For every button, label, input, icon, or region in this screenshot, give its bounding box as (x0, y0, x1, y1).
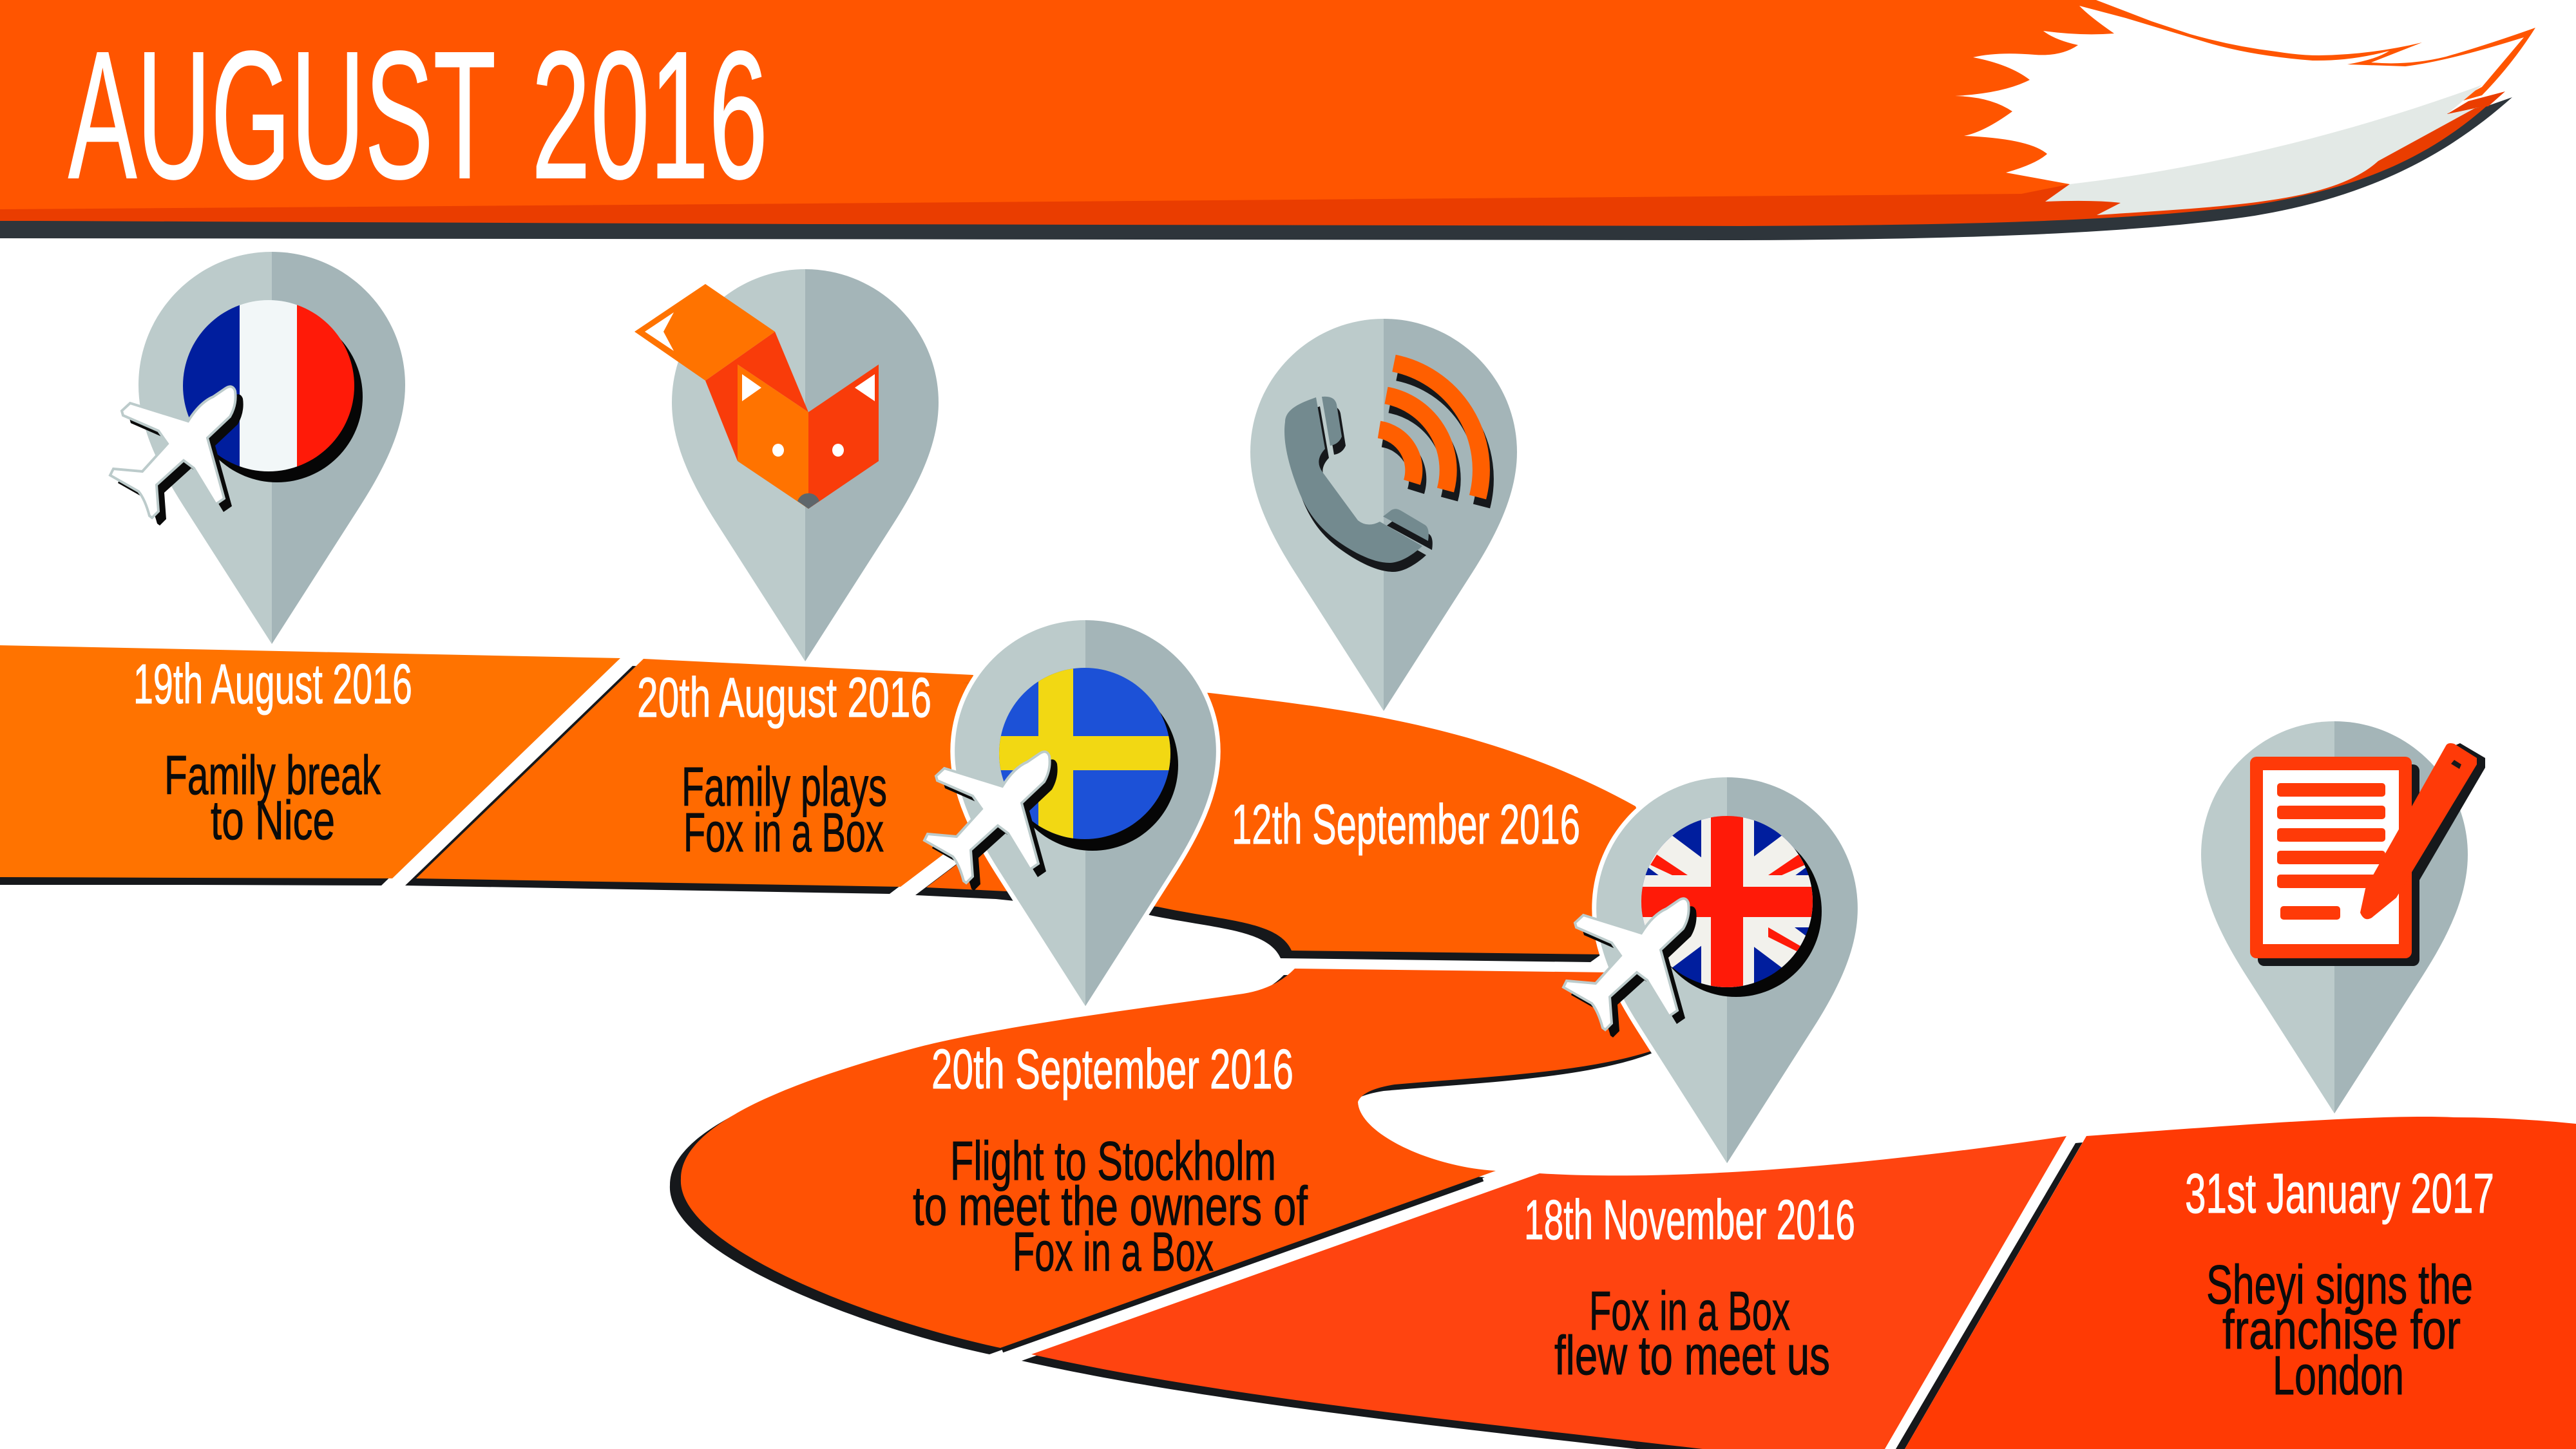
panel: 18th November 2016: flew to meet us (1554, 1325, 1830, 1387)
title: 2016 (531, 14, 768, 216)
pin: phone call (1250, 319, 1517, 711)
panel: 31st January 2017: London (2273, 1345, 2404, 1406)
panel: 20th September 2016: 20th September 2016 (931, 1038, 1293, 1101)
panel: 20th August 2016 (405, 659, 1031, 894)
panel: 20th September 2016: Fox in a Box (1013, 1222, 1214, 1283)
pin: United Kingdom (1563, 777, 1858, 1163)
panel: 18th November 2016: Fox in a Box (1589, 1281, 1790, 1342)
pin: Sweden (924, 620, 1216, 1006)
pin: France (110, 252, 405, 644)
panel: 20th August 2016: Family plays (682, 757, 887, 818)
panel: 31st January 2017: franchise for (2222, 1300, 2461, 1361)
panel: 31st January 2017: Sheyi signs the (2206, 1255, 2473, 1316)
title: AUGUST (68, 14, 496, 216)
panel: 20th August 2016: 20th August 2016 (637, 667, 931, 729)
panel: 18th November 2016: 18th November 2016 (1524, 1189, 1855, 1251)
panel: 20th September 2016: Flight to Stockholm (950, 1131, 1276, 1192)
panel: 19th August 2016: to Nice (211, 790, 335, 851)
panel: 20th August 2016: Fox in a Box (683, 802, 884, 864)
panel: 20th September 2016 (670, 969, 1688, 1354)
panel: 12th September 2016 (915, 675, 1675, 962)
header banner: fox tail (0, 0, 2535, 240)
panel: 19th August 2016: Family break (164, 745, 381, 806)
pin: signed document (2201, 721, 2485, 1113)
panel: 20th September 2016: to meet the owners of (913, 1176, 1308, 1237)
panel: 19th August 2016 (0, 645, 620, 886)
panel: 12th September 2016: 12th September 2016 (1232, 793, 1580, 856)
panel: 19th August 2016: 19th August 2016 (133, 653, 412, 715)
panel: 31st January 2017 (1896, 1117, 2576, 1449)
panel: 18th November 2016 (1022, 1136, 2066, 1449)
pin: Fox in a Box (634, 269, 939, 661)
